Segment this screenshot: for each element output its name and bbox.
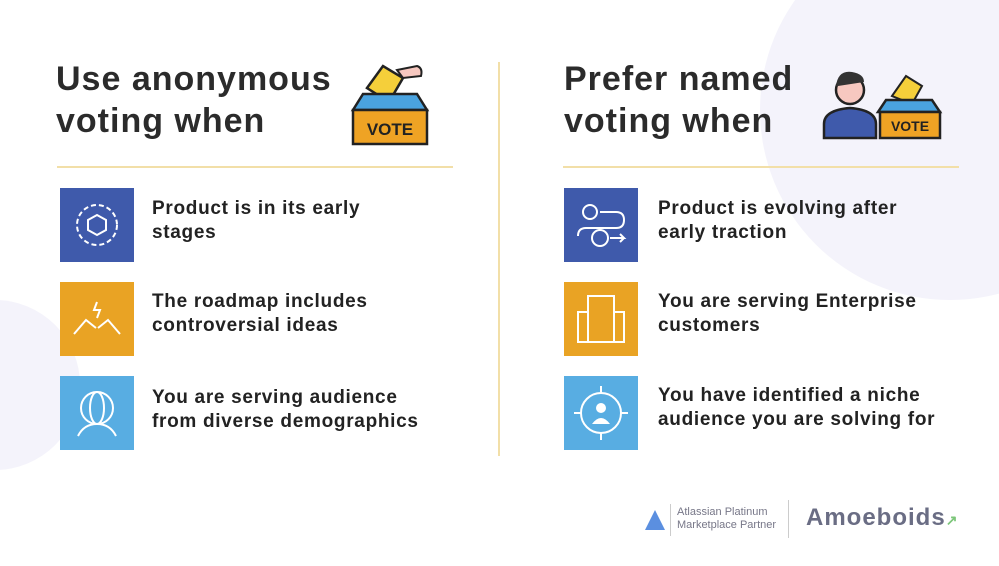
text: stages <box>152 222 216 243</box>
icon: vote box left: VOTE <box>367 120 413 139</box>
item: controversial <box>60 282 134 356</box>
footer logos <box>645 500 958 538</box>
item: niche <box>564 376 638 450</box>
text: from diverse demographics <box>152 411 419 432</box>
text: audience you are solving for <box>658 409 935 430</box>
text: The roadmap includes <box>152 291 368 312</box>
text: Product is in its early <box>152 198 360 219</box>
item: early stages <box>60 188 134 262</box>
title: right: voting when <box>564 102 773 140</box>
text: early traction <box>658 222 787 243</box>
title: left: voting when <box>56 102 265 140</box>
vertical divider <box>498 62 500 456</box>
divider right <box>563 166 959 168</box>
icon: person + vote box <box>822 72 942 140</box>
text: You are serving Enterprise <box>658 291 917 312</box>
text: customers <box>658 315 760 336</box>
title: right: Prefer named <box>564 60 793 98</box>
background circles <box>760 0 999 300</box>
icon: person + vote box: VOTE <box>891 118 929 134</box>
icon: atlassian <box>645 510 665 530</box>
title: left <box>56 60 332 140</box>
title: right <box>564 60 793 140</box>
text: controversial ideas <box>152 315 338 336</box>
title: left: Use anonymous <box>56 60 332 98</box>
footer logos: Marketplace Partner <box>677 519 776 531</box>
icon: vote box left <box>350 64 430 146</box>
item: evolving <box>564 188 638 262</box>
footer logos: Atlassian Platinum <box>677 506 768 518</box>
text: Product is evolving after <box>658 198 897 219</box>
footer logos: Amoeboids↗ <box>806 504 958 531</box>
text: You have identified a niche <box>658 385 920 406</box>
item: diverse <box>60 376 134 450</box>
text: You are serving audience <box>152 387 398 408</box>
item: enterprise <box>564 282 638 356</box>
divider left <box>57 166 453 168</box>
